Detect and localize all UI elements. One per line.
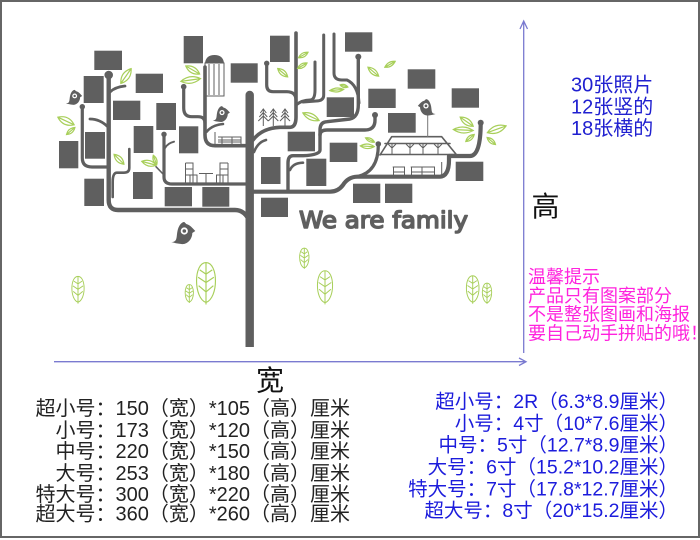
overall size table: 大号：253（宽）*180（高）厘米: [55, 462, 350, 485]
photo count note: 12张竖的: [571, 96, 653, 118]
icon: bird upper left: [66, 90, 82, 105]
photo count note: 18张横的: [571, 117, 653, 140]
overall size table: 超小号：150（宽）*105（高）厘米: [35, 397, 350, 420]
overall size table: 超大号：360（宽）*260（高）厘米: [35, 502, 350, 526]
reminder note: [528, 267, 700, 344]
width label: 宽: [256, 365, 284, 396]
photo size table: 超大号：8寸（20*15.2厘米）: [424, 500, 678, 522]
photo size table: 中号：5寸（12.7*8.9厘米）: [438, 434, 678, 456]
photo size table: [408, 391, 678, 522]
width arrow: [54, 358, 526, 366]
icon: pine trees: [258, 109, 290, 126]
photo size table: 小号：4寸（10*7.6厘米）: [455, 413, 678, 435]
icon: house: [380, 110, 457, 176]
tree trunk and branches: [80, 33, 484, 347]
photo size table: 超小号：2R（6.3*8.9厘米）: [435, 391, 678, 413]
icon: bird on house: [418, 99, 436, 116]
photo count note: 30张照片: [571, 74, 653, 96]
icon: gazebo tower: [205, 55, 224, 96]
reminder note: 不是整张图画和海报: [528, 304, 690, 324]
green branch leaves: [56, 51, 507, 168]
height arrow: [520, 21, 528, 353]
icon: sofa: [215, 132, 241, 145]
photo size table: 特大号：7寸（17.8*12.7厘米）: [408, 478, 678, 500]
falling leaves on the ground: [72, 248, 492, 305]
overall size table: 小号：173（宽）*120（高）厘米: [55, 419, 350, 442]
photo size table: 大号：6寸（15.2*10.2厘米）: [428, 456, 678, 478]
icon: table and chairs: [186, 163, 228, 183]
overall size table: [35, 397, 350, 526]
icon: bird centre: [213, 106, 230, 122]
photo frames: [59, 32, 483, 217]
slogan: We are family: [299, 208, 468, 234]
photo count note: [571, 74, 653, 140]
overall size table: 中号：220（宽）*150（高）厘米: [55, 440, 350, 463]
icon: large bird below branch: [171, 222, 195, 244]
overall size table: 特大号：300（宽）*220（高）厘米: [35, 483, 350, 506]
reminder note: 产品只有图案部分: [528, 286, 672, 306]
height label: 高: [531, 191, 560, 222]
tree illustration: [56, 32, 507, 347]
reminder note: 温馨提示: [528, 267, 600, 287]
